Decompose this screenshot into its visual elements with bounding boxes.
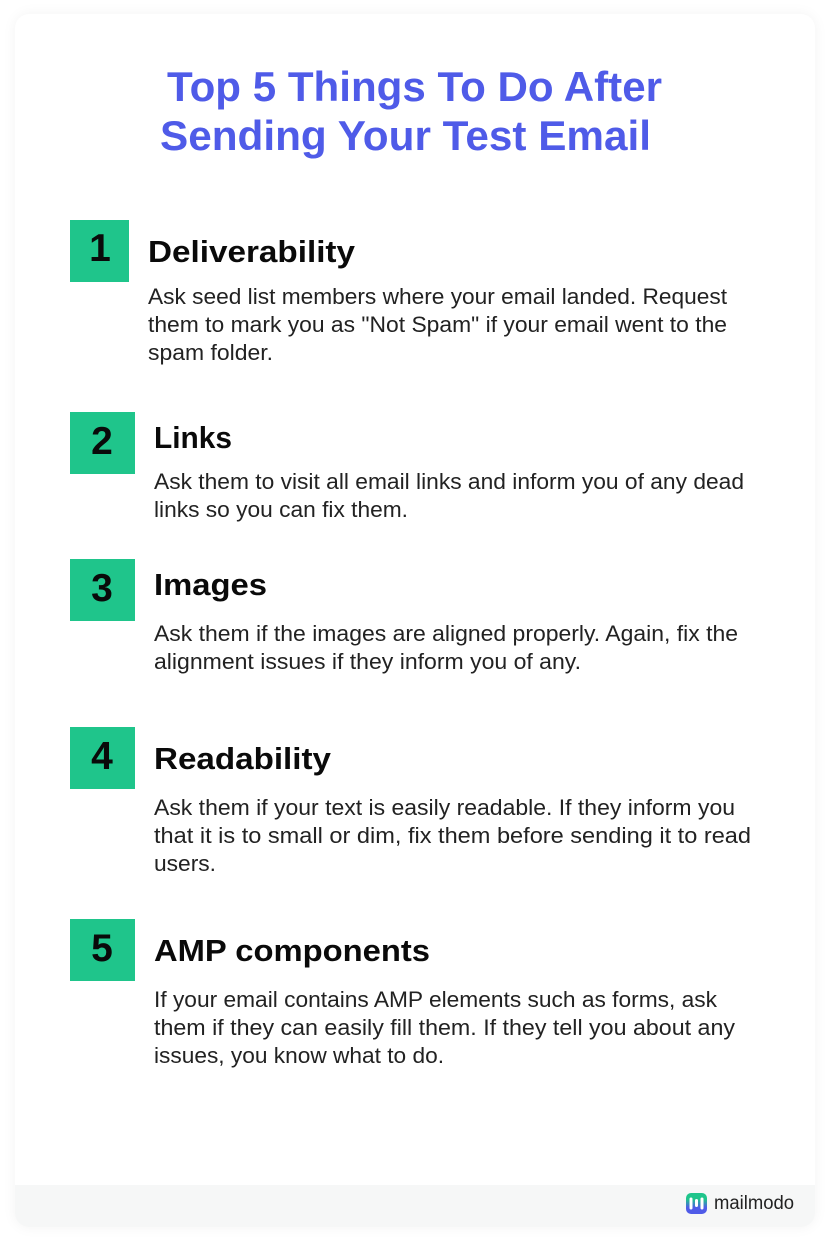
heading: readability: Readability bbox=[154, 741, 332, 776]
description: deliverability: Ask seed list members where your email landed. Request bbox=[148, 284, 728, 309]
item 3: images bbox=[70, 559, 738, 674]
footer band bbox=[15, 1185, 815, 1227]
item 1: deliverability bbox=[70, 220, 728, 365]
description: links bbox=[154, 469, 744, 522]
heading: amp components: AMP components bbox=[154, 933, 430, 968]
item 4: readability bbox=[70, 727, 751, 876]
description: images: alignment issues if they inform you of any. bbox=[154, 649, 581, 674]
description: amp components: If your email contains AMP elements such as forms, ask bbox=[154, 987, 718, 1012]
number badge 1 bbox=[70, 220, 129, 282]
description: images: Ask them if the images are aligned properly. Again, fix the bbox=[154, 621, 738, 646]
title bbox=[160, 63, 662, 159]
heading: deliverability: Deliverability bbox=[148, 234, 356, 269]
item 2: links bbox=[70, 412, 744, 522]
number badge 5: 5 bbox=[91, 927, 113, 970]
title: Top 5 Things To Do After bbox=[167, 63, 662, 110]
description: amp components: them if they can easily fill them. If they tell you about any bbox=[154, 1015, 736, 1040]
number badge 3 bbox=[70, 559, 135, 621]
heading: images: Images bbox=[154, 567, 267, 602]
number badge 3: 3 bbox=[91, 567, 113, 610]
description: readability: users. bbox=[154, 851, 216, 876]
description: deliverability: them to mark you as "Not Spam" if your email went to the bbox=[148, 312, 727, 337]
mailmodo logo bbox=[686, 1193, 794, 1214]
icon: mailmodo mark bbox=[686, 1193, 707, 1214]
description: deliverability: spam folder. bbox=[148, 340, 273, 365]
number badge 5 bbox=[70, 919, 135, 981]
number badge 4: 4 bbox=[91, 735, 113, 778]
description: images bbox=[154, 621, 738, 674]
number badge 2: 2 bbox=[91, 420, 113, 463]
number badge 2 bbox=[70, 412, 135, 474]
heading: links: Links bbox=[154, 420, 232, 455]
title: Sending Your Test Email bbox=[160, 112, 651, 159]
description: readability: Ask them if your text is easily readable. If they inform you bbox=[154, 795, 735, 820]
wordmark: mailmodo bbox=[714, 1193, 794, 1214]
description: deliverability bbox=[148, 284, 728, 365]
description: amp components bbox=[154, 987, 736, 1068]
item 5: amp components bbox=[70, 919, 736, 1068]
description: readability bbox=[154, 795, 751, 876]
description: readability: that it is to small or dim, fix them before sending it to read bbox=[154, 823, 751, 848]
number badge 4 bbox=[70, 727, 135, 789]
description: links: Ask them to visit all email links and inform you of any dead bbox=[154, 469, 744, 494]
description: amp components: issues, you know what to do. bbox=[154, 1043, 444, 1068]
description: links: links so you can fix them. bbox=[154, 497, 408, 522]
number badge 1: 1 bbox=[89, 227, 111, 270]
